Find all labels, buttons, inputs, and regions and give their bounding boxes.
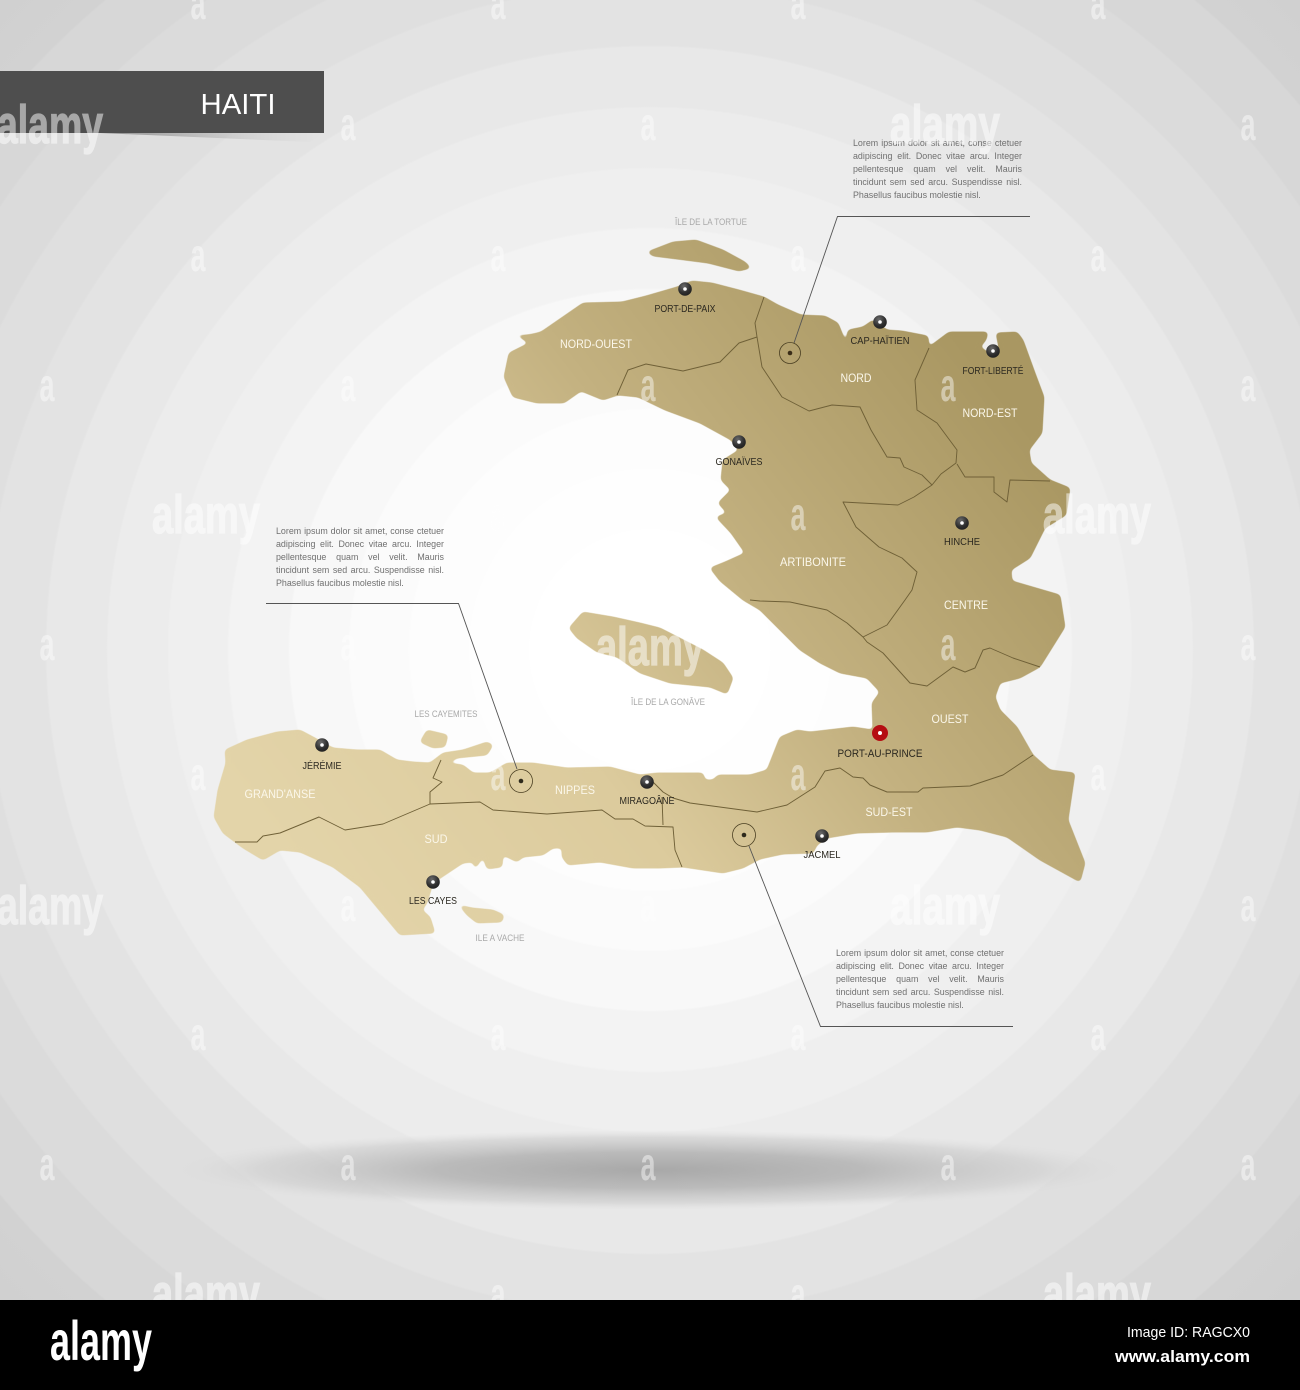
watermark text: a bbox=[490, 1268, 506, 1320]
city: Port-de-Paix bbox=[654, 282, 716, 315]
watermark text: a bbox=[40, 618, 55, 670]
callout: west: Lorem ipsum dolor sit amet, conse ctetuer bbox=[276, 526, 444, 536]
watermark text: alamy bbox=[0, 95, 103, 155]
city: Miragoâne bbox=[620, 775, 675, 807]
watermark text: a bbox=[490, 488, 506, 540]
watermark text: a bbox=[640, 359, 656, 411]
title banner bbox=[0, 71, 324, 142]
watermark text: a bbox=[1240, 359, 1256, 411]
capital: Port-au-Prince: PORT-AU-PRINCE bbox=[838, 748, 922, 760]
footer bar: www.alamy.com bbox=[1114, 1347, 1250, 1366]
watermark text: a bbox=[40, 359, 55, 411]
mainland bbox=[214, 281, 1085, 935]
region labels: CENTRE bbox=[944, 598, 988, 612]
watermark text: a bbox=[190, 1008, 206, 1060]
city: Les Cayes bbox=[409, 875, 457, 907]
watermark text: a bbox=[790, 229, 806, 281]
watermark text: a bbox=[640, 1138, 656, 1190]
callout: north: Lorem ipsum dolor sit amet, conse ctetuer bbox=[853, 138, 1022, 148]
footer bar: Image ID: RAGCX0 bbox=[1127, 1324, 1250, 1341]
watermark text: a bbox=[940, 1138, 956, 1190]
callout: west bbox=[266, 525, 532, 792]
region labels: ARTIBONITE bbox=[780, 555, 846, 569]
callout: south: adipiscing elit. Donec vitae arcu. Integer bbox=[836, 961, 1004, 971]
city: Jérémie bbox=[302, 738, 342, 772]
department borders bbox=[235, 297, 1050, 867]
title banner: HAITI bbox=[200, 89, 276, 121]
callout: west: adipiscing elit. Donec vitae arcu. Integer bbox=[276, 539, 444, 549]
island labels: LES CAYEMITES bbox=[414, 709, 478, 719]
callout: south: tincidunt sem sed arcu. Suspendisse nisl. bbox=[836, 987, 1004, 997]
watermark text: a bbox=[790, 748, 806, 800]
region labels: NIPPES bbox=[555, 783, 595, 797]
callout: north: tincidunt sem sed arcu. Suspendisse nisl. bbox=[853, 177, 1022, 187]
island: Les Cayemites bbox=[420, 730, 448, 748]
callout: north: pellentesque quam vel velit. Mauris bbox=[853, 164, 1022, 174]
watermark text: a bbox=[1240, 618, 1256, 670]
watermark text: a bbox=[1090, 1008, 1106, 1060]
city: Les Cayes: LES CAYES bbox=[409, 896, 457, 907]
watermark text: a bbox=[640, 879, 656, 931]
city: Fort-Liberté bbox=[962, 344, 1024, 377]
watermark text: a bbox=[340, 98, 356, 150]
callout: north: adipiscing elit. Donec vitae arcu. Integer bbox=[853, 151, 1022, 161]
watermark text: a bbox=[790, 1268, 806, 1320]
watermark text: a bbox=[40, 1138, 55, 1190]
callout: west: Phasellus faucibus molestie nisl. bbox=[276, 578, 404, 588]
region labels: SUD bbox=[424, 832, 448, 846]
watermark text: a bbox=[1240, 879, 1256, 931]
region labels: GRAND'ANSE bbox=[244, 787, 316, 801]
region labels: NORD bbox=[840, 371, 872, 385]
watermark text: a bbox=[1090, 229, 1106, 281]
callout: south bbox=[732, 824, 1013, 1026]
region labels: NORD-OUEST bbox=[560, 337, 633, 351]
island labels: ILE A VACHE bbox=[476, 933, 524, 943]
watermark text: a bbox=[490, 229, 506, 281]
callout: south: pellentesque quam vel velit. Mauris bbox=[836, 974, 1004, 984]
watermark text: a bbox=[340, 1138, 356, 1190]
watermark text: a bbox=[1240, 98, 1256, 150]
capital: Port-au-Prince bbox=[838, 725, 922, 760]
callout: south: Phasellus faucibus molestie nisl. bbox=[836, 1000, 964, 1010]
watermark text: a bbox=[1240, 1138, 1256, 1190]
island labels bbox=[414, 217, 747, 943]
island: Île de la Tortue bbox=[647, 240, 751, 271]
watermark text: a bbox=[340, 618, 356, 670]
watermark text: a bbox=[640, 98, 656, 150]
city: Cap-Haïtien bbox=[850, 315, 910, 347]
region labels: NORD-EST bbox=[962, 406, 1018, 420]
watermark text: a bbox=[340, 879, 356, 931]
watermark text: alamy bbox=[0, 876, 103, 936]
city: Jacmel bbox=[804, 829, 841, 861]
region labels: SUD-EST bbox=[866, 805, 913, 819]
city: Fort-Liberté: FORT-LIBERTÉ bbox=[962, 364, 1024, 377]
floor shadow bbox=[172, 1130, 1128, 1210]
watermark text: alamy bbox=[1043, 1264, 1151, 1324]
callout: north: Phasellus faucibus molestie nisl. bbox=[853, 190, 981, 200]
watermark text: a bbox=[340, 359, 356, 411]
watermark text: a bbox=[190, 229, 206, 281]
city pins and labels bbox=[302, 282, 1024, 907]
watermark text: a bbox=[940, 618, 956, 670]
watermark text: a bbox=[790, 488, 806, 540]
callout: south: Lorem ipsum dolor sit amet, conse ctetuer bbox=[836, 948, 1004, 958]
city: Hinche: HINCHE bbox=[944, 537, 980, 548]
map of Haiti bbox=[214, 240, 1085, 935]
callout: west: tincidunt sem sed arcu. Suspendisse nisl. bbox=[276, 565, 444, 575]
city: Jacmel: JACMEL bbox=[804, 850, 841, 861]
region labels: OUEST bbox=[932, 712, 969, 726]
footer bar bbox=[0, 1300, 1300, 1390]
watermark text: a bbox=[790, 1008, 806, 1060]
watermark text: alamy bbox=[1043, 485, 1151, 545]
watermark text: alamy bbox=[596, 617, 704, 677]
city: Cap-Haïtien: CAP-HAÏTIEN bbox=[850, 335, 910, 347]
footer bar: alamy bbox=[50, 1309, 152, 1372]
city: Miragoâne: MIRAGOÂNE bbox=[620, 794, 675, 807]
city: Gonaïves: GONAÏVES bbox=[716, 456, 763, 468]
watermark text: a bbox=[490, 748, 506, 800]
watermark text: a bbox=[1090, 748, 1106, 800]
island: Ile a Vache bbox=[459, 905, 504, 923]
callout: west: pellentesque quam vel velit. Mauris bbox=[276, 552, 444, 562]
city: Jérémie: JÉRÉMIE bbox=[302, 759, 342, 772]
island: Île de la Gonâve bbox=[569, 612, 733, 694]
watermark text: alamy bbox=[152, 485, 260, 545]
watermark text: a bbox=[190, 748, 206, 800]
region labels bbox=[244, 337, 1018, 846]
callout: north bbox=[780, 137, 1030, 364]
watermark text: alamy bbox=[890, 876, 1000, 936]
city: Gonaïves bbox=[716, 435, 763, 468]
city: Port-de-Paix: PORT-DE-PAIX bbox=[654, 304, 716, 315]
watermark text: alamy bbox=[152, 1264, 260, 1324]
watermark text: a bbox=[490, 1008, 506, 1060]
watermark text: a bbox=[940, 359, 956, 411]
island labels: ÎLE DE LA GONÂVE bbox=[630, 697, 705, 707]
city: Hinche bbox=[944, 516, 980, 548]
watermark text: alamy bbox=[890, 95, 1000, 155]
island labels: ÎLE DE LA TORTUE bbox=[674, 217, 747, 227]
